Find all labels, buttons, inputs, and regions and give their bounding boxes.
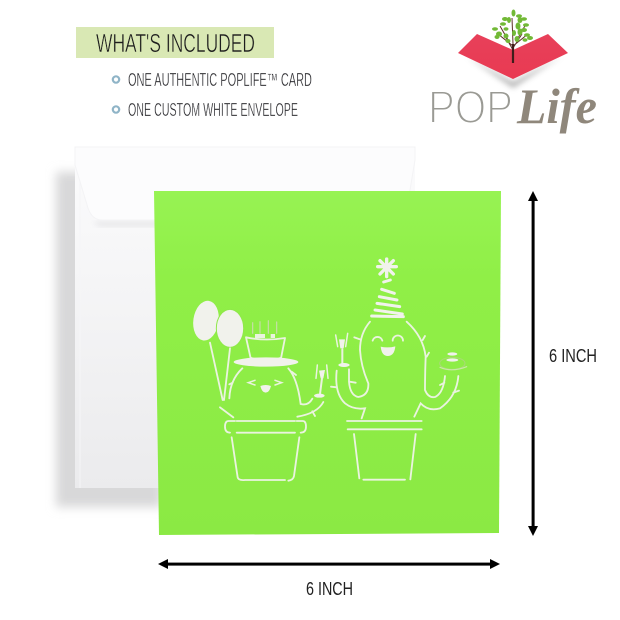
width arrow bbox=[158, 559, 500, 569]
height arrow bbox=[528, 191, 538, 536]
height label: 6 INCH bbox=[549, 346, 597, 366]
cake hat bbox=[234, 321, 298, 367]
right cactus face bbox=[373, 335, 403, 356]
balloons bbox=[191, 299, 244, 400]
green card bbox=[154, 191, 501, 535]
logo word life: Life bbox=[516, 78, 597, 134]
right glass bbox=[336, 333, 350, 367]
cone hat bbox=[372, 259, 403, 317]
logo word pop: POP bbox=[428, 81, 513, 133]
envelope shadow bbox=[56, 172, 162, 507]
left cactus face bbox=[248, 380, 282, 393]
list item: envelope: ONE CUSTOM WHITE ENVELOPE bbox=[128, 100, 298, 120]
envelope bbox=[56, 147, 415, 507]
envelope flap shadow bbox=[92, 222, 160, 226]
list item: card bbox=[113, 70, 312, 90]
width label: 6 INCH bbox=[306, 579, 353, 599]
cake on plate bbox=[440, 352, 467, 370]
logo red book bbox=[458, 34, 568, 79]
list item: envelope bbox=[113, 100, 298, 120]
left glass bbox=[314, 365, 328, 398]
right cactus body bbox=[331, 322, 459, 418]
logo shadow bbox=[466, 56, 562, 88]
left cactus body bbox=[220, 368, 323, 417]
list item: card: ONE AUTHENTIC POPLIFE™ CARD bbox=[128, 70, 312, 90]
cactus right: cone hat and cake bbox=[331, 259, 467, 480]
logo: poplife bbox=[428, 10, 597, 134]
cactus left: party hat and balloons bbox=[191, 299, 328, 481]
left pot bbox=[225, 421, 306, 481]
heading: what's included bbox=[76, 27, 274, 58]
logo tree bbox=[492, 10, 533, 63]
right pot bbox=[347, 421, 422, 480]
envelope flap bbox=[75, 147, 415, 220]
envelope body bbox=[75, 160, 415, 488]
heading: what's included: WHAT'S INCLUDED bbox=[96, 28, 255, 58]
